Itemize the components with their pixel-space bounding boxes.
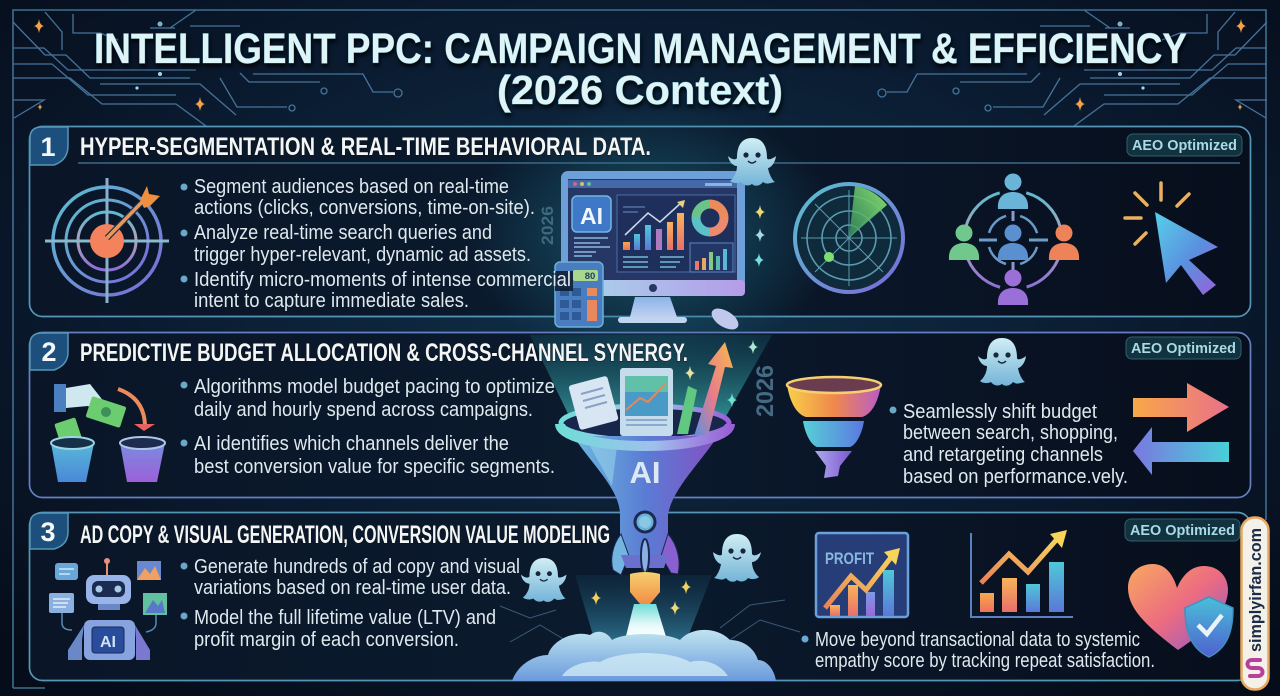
panel 3: ad copy and visual generation (30, 512, 1250, 680)
icon: monitor dashboard (561, 171, 745, 323)
body text panel 1: trigger hyper-relevant, dynamic ad assets. (194, 244, 531, 266)
body text panel 3 (180, 556, 520, 651)
body text panel 1: Analyze real-time search queries and (194, 222, 492, 244)
body text panel 2: Algorithms model budget pacing to optimize (194, 376, 555, 398)
AEO badge 1 (1127, 134, 1242, 156)
chat bubbles and images (49, 561, 167, 615)
brand pill: simplyirfan.com: simplyirfan.com (1246, 528, 1265, 652)
body text panel 1 (180, 176, 573, 312)
panel 1: hyper-segmentation (30, 126, 1250, 316)
body text panel 3 right: Move beyond transactional data to systemic (815, 629, 1140, 651)
icon: profit chart window: PROFIT (825, 549, 874, 568)
rocket light beam (575, 575, 712, 642)
body text panel 3 right (802, 629, 1155, 672)
section headings: HYPER-SEGMENTATION & REAL-TIME BEHAVIORAL DATA. (80, 133, 651, 161)
icon: left arrow (1133, 427, 1229, 475)
AEO badge 3: AEO Optimized (1130, 523, 1235, 539)
body text panel 1: actions (clicks, conversions, time-on-site). (194, 197, 535, 219)
body text panel 2: daily and hourly spend across campaigns. (194, 399, 533, 421)
2026 label near funnel: 2026 (752, 365, 779, 417)
sparkles around funnel and rocket (591, 340, 758, 615)
AEO badge 1: AEO Optimized (1132, 138, 1237, 154)
body text panel 3: Generate hundreds of ad copy and visual (194, 556, 520, 578)
icon: target with arrow (45, 178, 169, 303)
rocket exhaust (625, 604, 667, 640)
number tab 2 (30, 333, 68, 370)
ghost 2 (978, 338, 1026, 386)
icon: profit chart window (816, 533, 908, 617)
body text panel 2 right: Seamlessly shift budget (903, 401, 1097, 423)
section headings (80, 133, 688, 549)
number tab 1 (30, 127, 68, 165)
body text panel 2 right: and retargeting channels (903, 444, 1103, 466)
ghost 4 (713, 534, 761, 582)
funnel contents: rising arrow (677, 342, 733, 436)
number tab 3: 3 (40, 517, 56, 547)
bar chart on monitor (623, 200, 685, 250)
body text panel 1: Segment audiences based on real-time (194, 176, 509, 198)
body text panel 2 right: between search, shopping, (903, 422, 1118, 444)
body text panel 3 right: empathy score by tracking repeat satisfaction. (815, 650, 1155, 672)
body text panel 1: intent to capture immediate sales. (194, 290, 469, 312)
AI badge (572, 196, 611, 232)
circuit decoration: top left (13, 10, 402, 126)
icon: small funnel (787, 377, 881, 478)
ghost 3 (521, 558, 567, 602)
section headings: AD COPY & VISUAL GENERATION, CONVERSION VALUE MODELING (80, 521, 610, 549)
circuit decoration: top right (878, 10, 1267, 126)
icon: robot: AI (100, 634, 116, 651)
icon: cursor with click rays (1125, 183, 1218, 295)
number tab 3 (30, 513, 68, 549)
funnel label: AI (630, 455, 660, 490)
ghost 1 (728, 138, 776, 186)
panel 2: predictive budget (30, 332, 1250, 498)
icon: people network (949, 174, 1079, 305)
body text panel 2 right (890, 401, 1128, 488)
funnel contents: document (568, 376, 619, 430)
2026 label near monitor: 2026 (538, 206, 557, 245)
title (94, 25, 1187, 113)
body text panel 3: variations based on real-time user data. (194, 577, 511, 599)
body text panel 3: Model the full lifetime value (LTV) and (194, 607, 496, 629)
donut chart (696, 204, 724, 232)
AEO badge 2: AEO Optimized (1131, 341, 1236, 357)
title: (2026 Context) (497, 67, 783, 113)
icon: right arrow (1133, 383, 1229, 432)
sparkles right of monitor (754, 205, 765, 267)
rocket funnel illustration (560, 342, 733, 610)
AI badge: AI (580, 203, 603, 229)
icon: mouse (708, 304, 742, 334)
icon: robot (49, 558, 167, 660)
icon: heart with shield (1128, 564, 1233, 657)
number tab 1: 1 (40, 132, 56, 162)
upward light beam (530, 335, 772, 418)
AEO badge 2 (1126, 337, 1241, 359)
brand S logo (1248, 660, 1262, 676)
clouds (512, 630, 776, 681)
body text panel 2 right: based on performance.vely. (903, 466, 1128, 488)
body text panel 2: AI identifies which channels deliver the (194, 433, 509, 455)
body text panel 2: best conversion value for specific segments. (194, 456, 555, 478)
icon: money into cups (51, 384, 165, 482)
body text panel 1: Identify micro-moments of intense commercial (194, 269, 571, 291)
funnel contents: chart card (620, 368, 673, 436)
icon: calculator (555, 262, 603, 327)
icon: radar (795, 184, 903, 292)
faint circuit lines lower panel (500, 600, 800, 642)
brand pill: simplyirfan.com (1242, 518, 1268, 690)
number tab 2: 2 (41, 337, 57, 367)
AEO badge 3 (1125, 519, 1240, 541)
section headings: PREDICTIVE BUDGET ALLOCATION & CROSS-CHANNEL SYNERGY. (80, 339, 688, 367)
icon: calculator: 80 (585, 271, 595, 282)
body text panel 3: profit margin of each conversion. (194, 629, 459, 651)
centre teal glow (465, 100, 835, 370)
body text panel 2 (180, 376, 555, 478)
icon: growth bar chart (971, 530, 1073, 617)
